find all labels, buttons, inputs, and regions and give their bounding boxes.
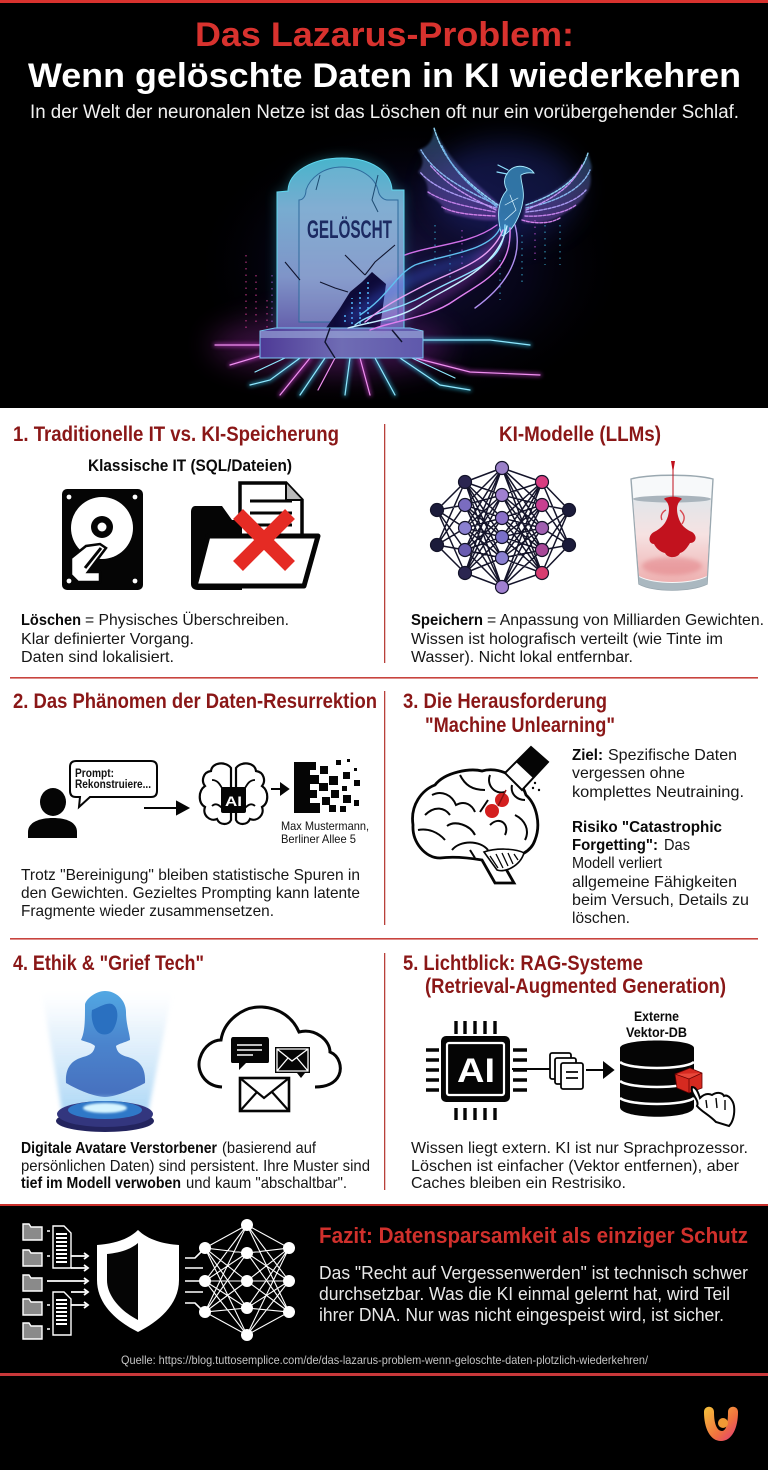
icon: person — [28, 788, 77, 838]
red cross — [238, 514, 290, 566]
prompt speech bubble: Rekonstruiere... — [75, 779, 151, 791]
text: goal and risk: Spezifische Daten — [608, 747, 737, 764]
wings — [418, 128, 500, 221]
reconstructed data label — [281, 819, 369, 846]
red spots — [495, 793, 509, 807]
text: resurrection explanation: Trotz "Bereinigung" bleiben statistische Spuren in — [21, 867, 360, 884]
arrow: AI to output — [271, 784, 288, 794]
text: deletion in classic IT — [21, 611, 289, 666]
text: goal and risk: komplettes Neutraining. — [572, 784, 744, 801]
prompt speech bubble: Prompt: — [75, 768, 114, 780]
icon: AI chip: AI — [457, 1052, 495, 1090]
text: digital avatars: (basierend auf — [222, 1140, 317, 1157]
text: goal and risk: Risiko "Catastrophic — [572, 819, 722, 836]
title line 2: Wenn gelöschte Daten in KI wiederkehren — [28, 57, 741, 95]
text: storing in AI models — [411, 612, 764, 666]
icon: AI brain: AI — [225, 793, 242, 809]
circuit roots — [215, 340, 540, 395]
tail — [348, 225, 517, 330]
text: resurrection explanation: den Gewichten. Gezieltes Prompting kann latente — [21, 885, 360, 902]
text: resurrection explanation: Fragmente wieder zusammensetzen. — [21, 903, 274, 920]
data rain left and right — [246, 220, 560, 330]
panel: section 1 classic IT — [13, 423, 339, 666]
prompt speech bubble — [70, 761, 157, 807]
database label: Externe — [634, 1008, 679, 1024]
conclusion heading: Fazit: Datensparsamkeit als einziger Schutz — [319, 1223, 748, 1248]
reconstructed data label: Berliner Allee 5 — [281, 832, 356, 846]
text: digital avatars: Digitale Avatare Verstorbener — [21, 1140, 217, 1157]
heading 5: (Retrieval-Augmented Generation) — [425, 975, 726, 998]
small envelope — [275, 1047, 310, 1078]
text: RAG explanation: Wissen liegt extern. KI ist nur Sprachprozessor. — [411, 1140, 748, 1157]
icon: dissolving pixel block — [294, 759, 360, 813]
text: deletion in classic IT: Löschen — [21, 612, 81, 629]
text: deletion in classic IT: Daten sind lokalisiert. — [21, 649, 174, 666]
text: goal and risk: Ziel: — [572, 747, 603, 764]
text: RAG explanation: Löschen ist einfacher (Vektor entfernen), aber — [411, 1158, 740, 1175]
network — [205, 1225, 289, 1335]
connector line — [512, 1068, 552, 1070]
body and head — [499, 166, 534, 236]
icon: vector database — [620, 1040, 734, 1126]
text: deletion in classic IT: Klar definierter Vorgang. — [21, 631, 194, 648]
panel: conclusion footer — [0, 1204, 768, 1376]
hero illustration: tombstone and data phoenix — [190, 115, 630, 415]
conclusion text — [319, 1263, 748, 1325]
ink plume — [639, 461, 707, 590]
text: goal and risk: beim Versuch, Details zu — [572, 892, 749, 909]
cracks — [285, 245, 408, 345]
panel: section 4 ethics and grief tech — [13, 952, 370, 1192]
subheading classic IT: Klassische IT (SQL/Dateien) — [88, 457, 292, 475]
heading 3: "Machine Unlearning" — [425, 714, 615, 737]
shield — [97, 1230, 179, 1332]
conclusion text: Das "Recht auf Vergessenwerden" ist technisch schwer — [319, 1263, 748, 1283]
section dividers — [10, 424, 758, 1190]
heading 2: 2. Das Phänomen der Daten-Resurrektion — [13, 690, 377, 713]
database label: Vektor-DB — [626, 1024, 687, 1040]
heading 5: 5. Lichtblick: RAG-Systeme — [403, 952, 643, 975]
text: goal and risk: Das — [664, 837, 690, 854]
icon: glass with ink — [631, 461, 713, 590]
red cube — [675, 1068, 702, 1093]
text: resurrection explanation — [21, 867, 360, 920]
subtitle: In der Welt der neuronalen Netze ist das Löschen oft nur ein vorübergehender Schlaf. — [30, 102, 739, 123]
text: goal and risk — [572, 747, 749, 927]
icon: brand logo — [704, 1407, 738, 1441]
text: storing in AI models: = Anpassung von Milliarden Gewichten. — [487, 612, 764, 629]
icon: brain with eraser — [413, 747, 548, 883]
icon: cloud with messages — [199, 1007, 340, 1111]
heading 5 — [403, 952, 726, 998]
panel: section 2 data resurrection — [13, 690, 377, 920]
tombstone — [260, 158, 423, 358]
heading 3: 3. Die Herausforderung — [403, 690, 607, 713]
icon: document stack — [550, 1053, 583, 1089]
large envelope — [240, 1078, 289, 1111]
text: storing in AI models: Wasser). Nicht lokal entfernbar. — [411, 649, 633, 666]
eraser — [505, 747, 548, 791]
phoenix — [348, 128, 592, 330]
text: storing in AI models: Speichern — [411, 612, 483, 629]
panel: section 3 machine unlearning — [403, 690, 749, 927]
text: goal and risk: löschen. — [572, 910, 630, 927]
icon: hologram avatar — [42, 991, 172, 1132]
heading 1: 1. Traditionelle IT vs. KI-Speicherung — [13, 423, 339, 446]
conclusion text: ihrer DNA. Nur was nicht eingespeist wird, ist sicher. — [319, 1305, 724, 1325]
white content panel — [0, 408, 768, 1205]
panel: section 5 RAG systems — [403, 952, 748, 1192]
text: storing in AI models: Wissen ist holografisch verteilt (wie Tinte im — [411, 631, 723, 648]
text: digital avatars — [21, 1140, 370, 1192]
arrow: docs to database — [586, 1063, 613, 1077]
heading AI models: KI-Modelle (LLMs) — [499, 423, 661, 446]
hand — [692, 1087, 734, 1126]
arrow: prompt to AI — [144, 802, 188, 814]
text: RAG explanation: Caches bleiben ein Restrisiko. — [411, 1175, 626, 1192]
heading 4: 4. Ethik & "Grief Tech" — [13, 952, 204, 975]
text: goal and risk: allgemeine Fähigkeiten — [572, 874, 737, 891]
heading 3 — [403, 690, 615, 737]
icon: AI chip — [426, 1021, 527, 1120]
text: digital avatars: tief im Modell verwoben — [21, 1175, 181, 1192]
chat bubble — [231, 1037, 269, 1070]
conclusion text: durchsetzbar. Was die KI einmal gelernt hat, wird Teil — [319, 1284, 730, 1304]
title line 1: Das Lazarus-Problem: — [195, 16, 574, 54]
icon: hard drive — [62, 489, 143, 590]
source line: Quelle: https://blog.tuttosemplice.com/de/das-lazarus-problem-wenn-geloschte-daten-plotzlich-wiederkehren/ — [121, 1353, 649, 1367]
icon: AI brain — [200, 763, 267, 824]
database label — [626, 1008, 687, 1040]
reconstructed data label: Max Mustermann, — [281, 819, 369, 833]
text: RAG explanation — [411, 1140, 748, 1192]
text: goal and risk: vergessen ohne — [572, 765, 685, 782]
folders and servers — [23, 1224, 42, 1339]
panel: section 1 AI models — [411, 423, 764, 666]
icon: folder with red cross — [191, 483, 318, 590]
icon: neural network — [430, 462, 576, 594]
header panel — [0, 0, 768, 123]
text: goal and risk: Forgetting": — [572, 837, 658, 854]
text: digital avatars: und kaum "abschaltbar". — [186, 1175, 347, 1192]
tombstone label: GELÖSCHT — [307, 215, 392, 244]
text: goal and risk: Modell verliert — [572, 855, 662, 872]
icon: data funnel with shield and network — [23, 1219, 295, 1341]
text: deletion in classic IT: = Physisches Überschreiben. — [85, 611, 289, 629]
text: digital avatars: persönlichen Daten) sind persistent. Ihre Muster sind — [21, 1158, 370, 1175]
